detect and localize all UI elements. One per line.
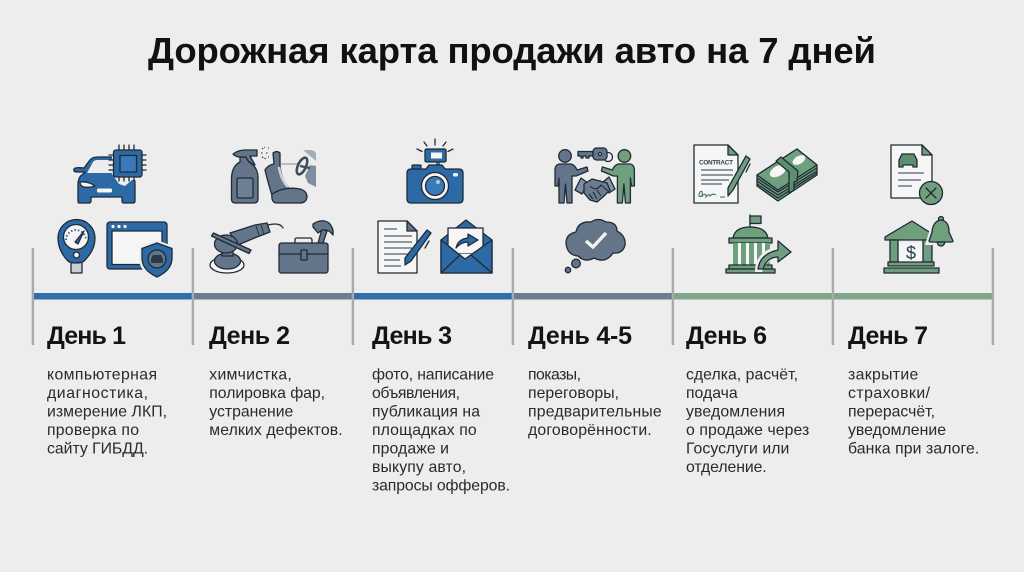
icon: spray bottle — [232, 147, 269, 203]
text: day 3 tasks: выкупу авто, — [372, 459, 466, 476]
icon: thought cloud with check — [565, 220, 625, 273]
text: day 1 tasks — [47, 366, 167, 457]
icon: document with pen — [378, 221, 431, 273]
icon: signed contract and pen: CONTRACT — [699, 160, 733, 166]
text: day 6 tasks: отделение. — [686, 459, 767, 476]
text: day 3 tasks: объявления, — [372, 385, 460, 402]
panel: day 1 — [47, 145, 175, 457]
text: day 4-5 tasks: предварительные — [528, 404, 662, 421]
text: day 6 tasks: Госуслуги или — [686, 440, 789, 457]
text: day 2 tasks — [209, 366, 343, 439]
icon: car with chip — [74, 145, 147, 203]
icon: car document with cancel mark — [891, 145, 942, 204]
heading: day 1: День 1 — [47, 322, 126, 350]
text: day 6 tasks: уведомления — [686, 404, 785, 421]
text: day 6 tasks: подача — [686, 385, 738, 402]
timeline — [32, 248, 994, 345]
heading: day 4-5: День 4-5 — [528, 322, 632, 350]
heading: day 3: День 3 — [372, 322, 452, 350]
icon: seller — [555, 150, 588, 203]
text: day 3 tasks: публикация на — [372, 404, 480, 421]
text: day 7 tasks — [848, 366, 979, 457]
text: day 7 tasks: банка при залоге. — [848, 440, 979, 457]
text: day 7 tasks: страховки/ — [848, 385, 931, 402]
heading: day 7: День 7 — [848, 322, 928, 350]
icon: envelope with arrow — [441, 220, 492, 273]
text: day 6 tasks — [686, 366, 809, 476]
text: day 6 tasks: сделка, расчёт, — [686, 366, 798, 383]
icon: buyer — [601, 150, 634, 203]
icon: handshake — [575, 177, 615, 202]
icon: government building with arrow — [726, 215, 795, 273]
icon: camera with flash — [407, 139, 463, 203]
icon: car seat and steering wheel — [265, 150, 316, 203]
panel: day 2 — [209, 147, 343, 439]
text: day 3 tasks: продаже и — [372, 440, 449, 457]
panel: day 4-5 — [528, 148, 662, 439]
heading: day 2: День 2 — [209, 322, 290, 350]
text: day 1 tasks: компьютерная — [47, 366, 157, 383]
icon: people, key and handshake — [555, 148, 634, 203]
heading: day 6: День 6 — [686, 322, 767, 350]
text: day 2 tasks: устранение — [209, 404, 294, 421]
icon: bank with bell: $ — [906, 243, 916, 263]
panel: day 7 — [848, 145, 979, 457]
text: day 3 tasks: запросы офферов. — [372, 478, 510, 494]
icon: browser with shield — [107, 222, 175, 280]
text: day 7 tasks: перерасчёт, — [848, 404, 935, 421]
panel: day 6 — [686, 145, 817, 476]
icon: stack of money — [757, 149, 817, 201]
text: day 4-5 tasks: переговоры, — [528, 385, 619, 402]
icon: toolbox with hammer — [279, 221, 333, 273]
icon: bank with bell — [884, 215, 956, 273]
text: day 6 tasks: о продаже через — [686, 422, 809, 439]
text: day 2 tasks: мелких дефектов. — [209, 422, 343, 439]
text: day 7 tasks: уведомление — [848, 422, 946, 439]
title: Дорожная карта продажи авто на 7 дней — [148, 30, 876, 71]
text: day 1 tasks: сайту ГИБДД. — [47, 440, 148, 457]
icon: polisher — [210, 223, 283, 273]
text: day 4-5 tasks: договорённости. — [528, 422, 652, 439]
icon: paint thickness gauge — [58, 220, 95, 273]
text: day 4-5 tasks: показы, — [528, 366, 581, 383]
panel: day 3 — [372, 139, 510, 494]
text: day 4-5 tasks — [528, 366, 662, 439]
text: day 3 tasks: площадках по — [372, 422, 477, 439]
text: day 1 tasks: измерение ЛКП, — [47, 404, 167, 421]
text: day 1 tasks: диагностика, — [47, 385, 148, 402]
text: day 1 tasks: проверка по — [47, 422, 139, 439]
icon: car key — [578, 148, 612, 162]
text: day 2 tasks: полировка фар, — [209, 385, 325, 402]
text: day 7 tasks: закрытие — [848, 366, 919, 383]
icon: signed contract and pen — [694, 145, 750, 203]
text: day 3 tasks: фото, написание — [372, 366, 494, 383]
text: day 3 tasks — [372, 366, 510, 494]
text: day 2 tasks: химчистка, — [209, 366, 292, 383]
